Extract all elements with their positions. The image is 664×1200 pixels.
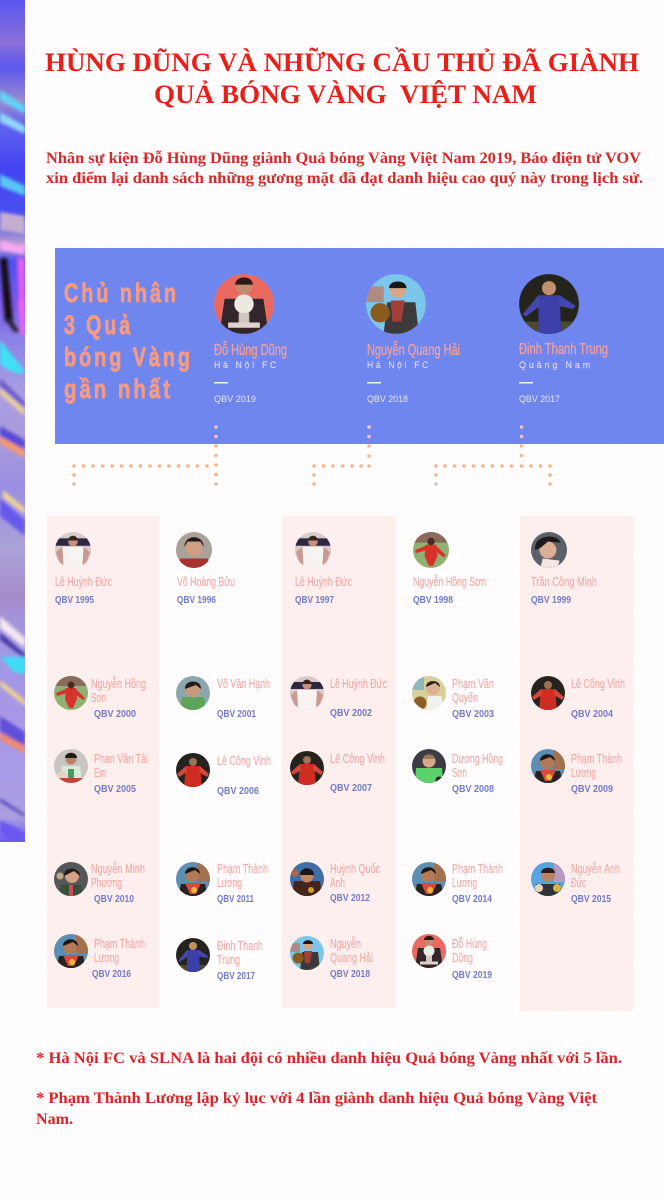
heading: latest winners: Chủ nhân xyxy=(64,278,179,308)
player: Võ Văn Hạnh 2001: Võ Văn Hạnh xyxy=(217,676,270,691)
player: Nguyễn Anh Đức 2015 xyxy=(531,861,620,905)
player: Huỳnh Quốc Anh 2012: QBV 2012 xyxy=(330,893,370,904)
player: Phạm Thành Lương 2011: Phạm Thành xyxy=(217,861,268,876)
player: Huỳnh Quốc Anh 2012 xyxy=(290,861,380,904)
player: Phạm Văn Quyến 2003 xyxy=(412,676,495,720)
winner: Nguyễn Quang Hải: Hà Nội FC xyxy=(367,360,431,371)
player: Nguyễn Quang Hải 2018: QBV 2018 xyxy=(330,969,370,980)
player: Võ Văn Hạnh 2001 xyxy=(176,676,270,720)
intro text: Nhân sự kiện Đỗ Hùng Dũng giành Quả bóng Vàng Việt Nam 2019, Báo điện tử VOV xyxy=(46,150,642,167)
column background 1 xyxy=(47,516,159,1008)
winner: Đỗ Hùng Dũng: Đỗ Hùng Dũng xyxy=(214,340,287,359)
player: Phạm Văn Quyến 2003: Phạm Văn xyxy=(452,676,494,691)
player: Phan Văn Tài Em 2005 xyxy=(54,749,148,795)
player: Nguyễn Hồng Sơn 2000: QBV 2000 xyxy=(94,709,137,720)
player: Phạm Thành Lương 2009: QBV 2009 xyxy=(571,784,614,795)
winner: Đỗ Hùng Dũng: Hà Nội FC xyxy=(214,360,279,371)
footnote: record xyxy=(36,1090,598,1128)
player: Nguyễn Quang Hải 2018: Nguyễn xyxy=(330,936,361,951)
column background 3 xyxy=(282,516,396,1008)
player: Phạm Thành Lương 2009: Lương xyxy=(571,765,596,780)
player: Đỗ Hùng Dũng 2019: QBV 2019 xyxy=(452,970,492,981)
player: Nguyễn Minh Phương 2010: QBV 2010 xyxy=(94,894,134,905)
player: Phan Văn Tài Em 2005: Em xyxy=(94,765,106,780)
player: Phạm Thành Lương 2009: Phạm Thành xyxy=(571,751,622,766)
title: QUẢ BÓNG VÀNG VIỆT NAM xyxy=(154,79,537,109)
winner: Đỗ Hùng Dũng: QBV 2019 xyxy=(214,394,256,405)
player: Lê Huỳnh Đức 1997 xyxy=(295,532,352,606)
player: Đinh Thanh Trung 2017: Trung xyxy=(217,952,240,967)
player: Phạm Thành Lương 2011: QBV 2011 xyxy=(217,894,254,905)
player: Nguyễn Hồng Sơn 1998: Nguyễn Hồng Sơn xyxy=(413,574,486,589)
player: Phạm Thành Lương 2014: Lương xyxy=(452,875,477,890)
player: Lê Huỳnh Đức 2002 xyxy=(290,676,387,719)
title xyxy=(45,46,639,109)
player: Phạm Văn Quyến 2003: Quyến xyxy=(452,690,478,705)
player: Trần Công Minh 1999 xyxy=(531,532,597,606)
player: Phạm Thành Lương 2011: Lương xyxy=(217,875,242,890)
player: Lê Huỳnh Đức 1995: Lê Huỳnh Đức xyxy=(55,574,112,589)
player: Lê Huỳnh Đức 1997: Lê Huỳnh Đức xyxy=(295,574,352,589)
player: Phạm Thành Lương 2016: Lương xyxy=(94,950,119,965)
column background 5 xyxy=(520,516,633,1011)
player: Nguyễn Anh Đức 2015: Đức xyxy=(571,875,586,890)
player: Phạm Thành Lương 2016: QBV 2016 xyxy=(92,969,131,980)
player: Nguyễn Hồng Sơn 1998 xyxy=(413,532,486,606)
title: HÙNG DŨNG VÀ NHỮNG CẦU THỦ ĐÃ GIÀNH xyxy=(45,46,639,77)
intro text: xin điểm lại danh sách những gương mặt đã đạt danh hiệu cao quý này trong lịch sử. xyxy=(46,170,643,187)
player: Lê Công Vinh 2006 xyxy=(176,753,271,797)
player: Đỗ Hùng Dũng 2019 xyxy=(412,934,492,981)
panel: winners grid xyxy=(47,516,633,1011)
player: Nguyễn Anh Đức 2015: QBV 2015 xyxy=(571,894,611,905)
heading: latest winners: bóng Vàng xyxy=(64,342,193,372)
player: Phạm Văn Quyến 2003: QBV 2003 xyxy=(452,709,495,720)
winner: Nguyễn Quang Hải xyxy=(366,274,460,405)
player: Đỗ Hùng Dũng 2019: Đỗ Hùng xyxy=(452,936,487,951)
player: Phan Văn Tài Em 2005: Phan Văn Tài xyxy=(94,751,148,766)
heading: latest winners xyxy=(64,278,193,404)
winner: Đinh Thanh Trung: Đinh Thanh Trung xyxy=(519,341,608,358)
player: Lê Huỳnh Đức 1995 xyxy=(55,532,112,606)
player: Lê Công Vinh 2007: QBV 2007 xyxy=(330,783,373,794)
player: Võ Hoàng Bửu 1996: QBV 1996 xyxy=(177,595,216,606)
player: Lê Huỳnh Đức 1997: QBV 1997 xyxy=(295,595,334,606)
player: Võ Hoàng Bửu 1996 xyxy=(176,532,235,606)
player: Phạm Thành Lương 2009 xyxy=(531,749,622,795)
winner: Đinh Thanh Trung: Quảng Nam xyxy=(519,360,593,371)
player: Đỗ Hùng Dũng 2019: Dũng xyxy=(452,950,473,965)
footnote: clubs: * Hà Nội FC và SLNA là hai đội có nhiều danh hiệu Quả bóng Vàng nhất với 5 lần. xyxy=(36,1050,622,1067)
player: Lê Công Vinh 2006: QBV 2006 xyxy=(217,786,260,797)
player: Lê Công Vinh 2004: QBV 2004 xyxy=(571,709,614,720)
player: Lê Huỳnh Đức 2002: Lê Huỳnh Đức xyxy=(330,676,387,691)
player: Huỳnh Quốc Anh 2012: Huỳnh Quốc xyxy=(330,861,380,876)
player: Trần Công Minh 1999: QBV 1999 xyxy=(531,595,571,606)
player: Lê Công Vinh 2007: Lê Công Vinh xyxy=(330,751,385,766)
decorative holographic strip xyxy=(0,0,25,842)
player: Lê Công Vinh 2004 xyxy=(531,676,625,720)
player: Dương Hồng Sơn 2008 xyxy=(412,749,503,795)
winner: Đinh Thanh Trung: QBV 2017 xyxy=(519,394,560,405)
player: Lê Công Vinh 2006: Lê Công Vinh xyxy=(217,753,271,768)
player: Nguyễn Hồng Sơn 2000: Sơn xyxy=(91,690,106,705)
winner: Đỗ Hùng Dũng xyxy=(214,274,287,405)
player: Lê Huỳnh Đức 2002: QBV 2002 xyxy=(330,708,373,719)
player: Nguyễn Anh Đức 2015: Nguyễn Anh xyxy=(571,861,620,876)
player: Nguyễn Minh Phương 2010 xyxy=(54,861,145,905)
heading: latest winners: gần nhất xyxy=(64,374,173,404)
player: Lê Công Vinh 2004: Lê Công Vinh xyxy=(571,676,625,691)
player: Phạm Thành Lương 2016 xyxy=(54,934,145,980)
player: Nguyễn Quang Hải 2018: Quang Hải xyxy=(330,950,373,965)
footnote: record: Nam. xyxy=(36,1111,73,1128)
intro text xyxy=(46,150,643,187)
player: Nguyễn Hồng Sơn 1998: QBV 1998 xyxy=(413,595,453,606)
footnote: record: * Phạm Thành Lương lập kỷ lục với 4 lần giành danh hiệu Quả bóng Vàng Việt xyxy=(36,1090,598,1107)
player: Phạm Thành Lương 2014 xyxy=(412,861,503,905)
player: Võ Hoàng Bửu 1996: Võ Hoàng Bửu xyxy=(177,574,235,589)
panel: three latest winners xyxy=(55,248,664,444)
player: Huỳnh Quốc Anh 2012: Anh xyxy=(330,875,345,890)
player: Nguyễn Hồng Sơn 2000 xyxy=(54,676,146,720)
player: Phan Văn Tài Em 2005: QBV 2005 xyxy=(94,784,137,795)
player: Nguyễn Hồng Sơn 2000: Nguyễn Hồng xyxy=(91,676,146,691)
player: Đinh Thanh Trung 2017: Đinh Thanh xyxy=(217,938,263,953)
player: Nguyễn Quang Hải 2018 xyxy=(290,936,373,980)
heading: latest winners: 3 Quả xyxy=(64,310,133,340)
player: Võ Văn Hạnh 2001: QBV 2001 xyxy=(217,709,256,720)
player: Nguyễn Minh Phương 2010: Nguyễn Minh xyxy=(91,861,145,876)
player: Phạm Thành Lương 2016: Phạm Thành xyxy=(94,936,145,951)
player: Đinh Thanh Trung 2017: QBV 2017 xyxy=(217,971,255,982)
player: Dương Hồng Sơn 2008: Sơn xyxy=(452,765,467,780)
player: Lê Công Vinh 2007 xyxy=(290,751,385,794)
player: Phạm Thành Lương 2014: QBV 2014 xyxy=(452,894,492,905)
player: Phạm Thành Lương 2014: Phạm Thành xyxy=(452,861,503,876)
winner: Nguyễn Quang Hải: Nguyễn Quang Hải xyxy=(367,340,460,359)
player: Phạm Thành Lương 2011 xyxy=(176,861,268,905)
player: Nguyễn Minh Phương 2010: Phương xyxy=(91,875,122,890)
player: Lê Huỳnh Đức 1995: QBV 1995 xyxy=(55,595,94,606)
player: Dương Hồng Sơn 2008: QBV 2008 xyxy=(452,784,495,795)
dotted connectors xyxy=(72,425,552,486)
player: Dương Hồng Sơn 2008: Dương Hồng xyxy=(452,751,503,766)
winner: Đinh Thanh Trung xyxy=(519,274,608,405)
winner: Nguyễn Quang Hải: QBV 2018 xyxy=(367,394,408,405)
player: Đinh Thanh Trung 2017 xyxy=(176,938,263,982)
player: Trần Công Minh 1999: Trần Công Minh xyxy=(531,574,597,589)
